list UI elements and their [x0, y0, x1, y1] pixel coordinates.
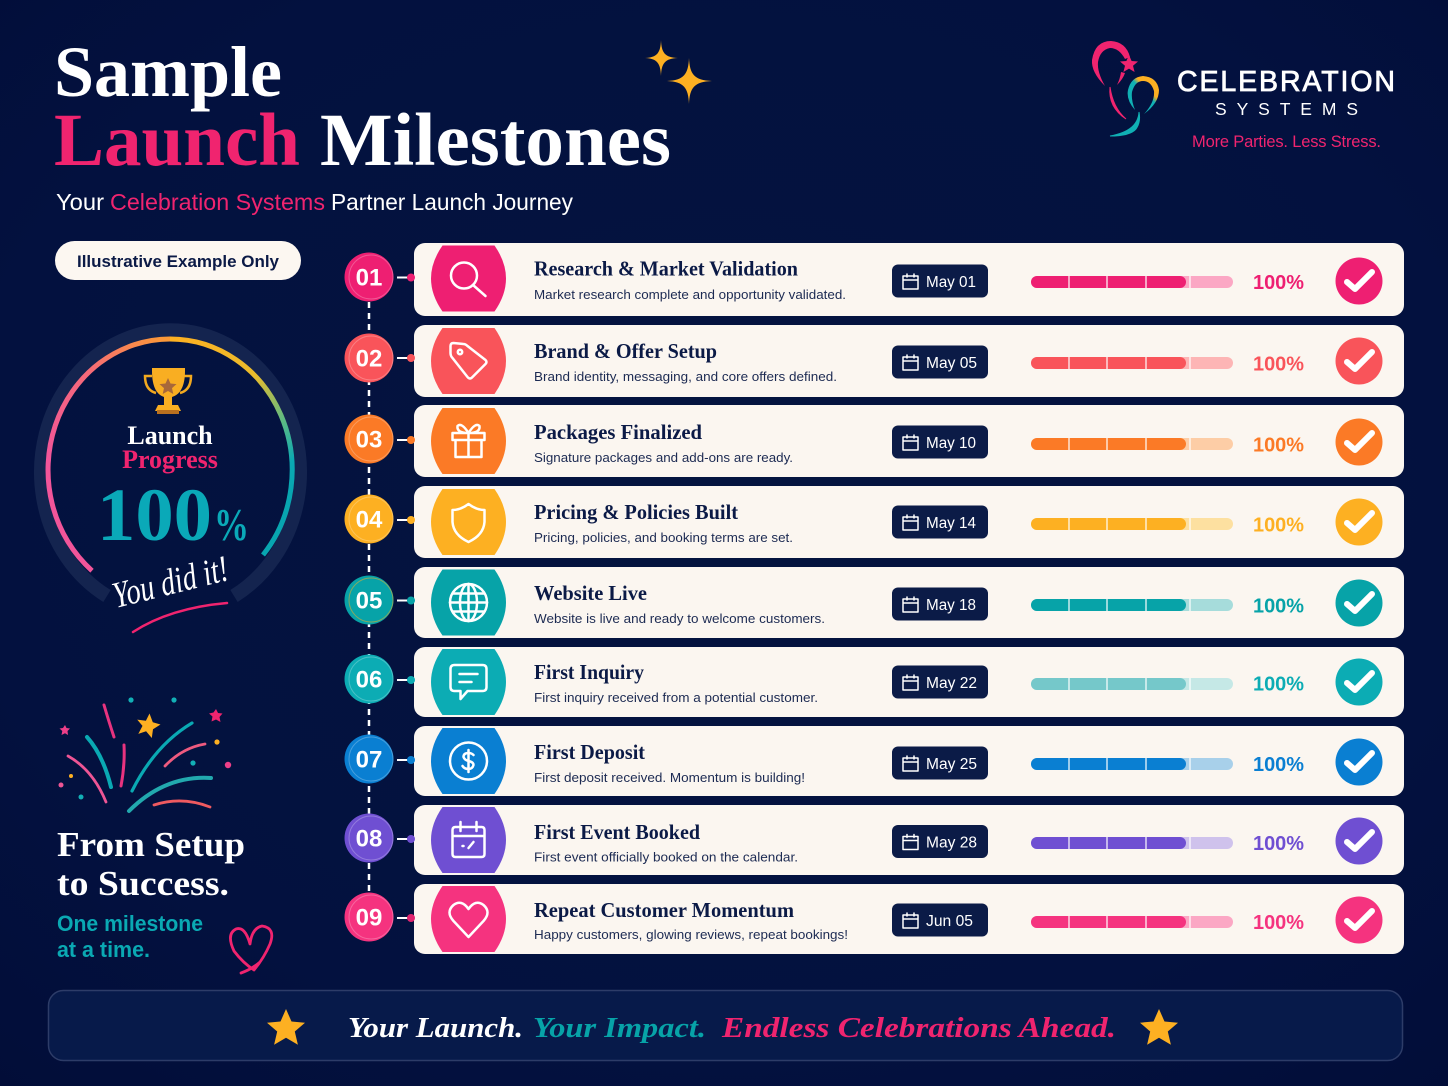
timeline dashed line [368, 280, 370, 917]
step number: 04 [356, 506, 383, 534]
date pill [892, 666, 988, 698]
footer message [348, 1012, 1116, 1044]
icon: check [1336, 658, 1382, 706]
date pill [892, 346, 988, 378]
milestone description: First deposit received. Momentum is building! [534, 770, 805, 785]
icon: check [1336, 580, 1382, 626]
milestone 03 [344, 405, 1404, 477]
footer message: Your Impact. [533, 1012, 706, 1044]
date pill [892, 825, 988, 858]
step number: 02 [356, 346, 382, 372]
icon: price tag [431, 328, 506, 394]
handwritten note: You did it! [108, 548, 233, 617]
step number: 05 [356, 588, 382, 614]
milestone description: Website is live and ready to welcome customers. [534, 611, 825, 626]
icon: check [1336, 818, 1382, 864]
heading: from setup to success [57, 825, 245, 903]
icon: hand-drawn heart [230, 926, 272, 973]
milestone 08 [344, 805, 1404, 875]
logo: Celebration Systems [1092, 41, 1395, 151]
date pill [892, 426, 988, 458]
footer message: Your Launch. [348, 1012, 523, 1044]
icon: sparkles [645, 40, 712, 104]
milestone description: Market research complete and opportunity validated. [534, 287, 846, 302]
subtitle [56, 189, 573, 215]
logo wordmark: CELEBRATION [1177, 66, 1395, 98]
step number [344, 892, 415, 942]
date pill: May 25 [926, 756, 977, 773]
gauge label [122, 421, 218, 474]
icon: heart [431, 886, 506, 952]
icon: check [1336, 738, 1382, 786]
icon: magnifier [431, 246, 506, 312]
card [414, 486, 1404, 558]
milestone description: First event officially booked on the calendar. [534, 850, 798, 864]
card [414, 405, 1404, 477]
title [54, 32, 671, 182]
milestone title: Research & Market Validation [534, 256, 798, 280]
gauge: launch progress [41, 330, 300, 632]
heading: from setup to success: From Setup [57, 825, 245, 864]
progress bar [1031, 276, 1233, 288]
tagline: one milestone at a time: at a time. [57, 937, 150, 962]
milestone description: First inquiry received from a potential customer. [534, 690, 818, 705]
date pill: May 10 [926, 435, 976, 452]
card [414, 243, 1404, 316]
badge: illustrative example: Illustrative Example Only [77, 252, 280, 271]
date pill [892, 746, 988, 780]
icon: check [1336, 498, 1382, 546]
milestone description: Happy customers, glowing reviews, repeat bookings! [534, 927, 848, 942]
progress bar [1031, 678, 1233, 690]
card [414, 726, 1404, 796]
percent: 100% [1253, 754, 1304, 776]
icon: balloons [1092, 41, 1159, 136]
milestone title: First Event Booked [534, 820, 700, 844]
icon: trophy [145, 368, 191, 414]
icon: right star [1140, 1009, 1178, 1045]
underline swoosh [133, 603, 227, 632]
icon: check [1336, 258, 1382, 304]
milestone 04 [344, 486, 1404, 558]
card [414, 567, 1404, 638]
icon: shield [431, 489, 506, 555]
title: Milestones [320, 99, 671, 182]
step number [344, 734, 415, 784]
step number [344, 414, 415, 464]
percent: 100% [1253, 674, 1304, 696]
subtitle: Your [56, 189, 104, 215]
progress bar [1031, 438, 1233, 450]
date pill [892, 588, 988, 620]
step number: 08 [356, 826, 382, 852]
icon: chat bubble [431, 649, 506, 715]
footer banner [48, 990, 1402, 1060]
title: Launch [54, 99, 300, 182]
date pill: May 14 [926, 515, 976, 532]
badge: illustrative example [55, 241, 301, 280]
milestone 07 [344, 726, 1404, 796]
title: Sample [54, 32, 282, 112]
date pill [892, 904, 988, 936]
milestone description: Brand identity, messaging, and core offers defined. [534, 369, 837, 384]
gauge label: Progress [122, 445, 218, 474]
icon: check [1336, 338, 1382, 384]
progress bar [1031, 916, 1233, 928]
icon: globe [431, 570, 506, 636]
subtitle: Partner Launch Journey [331, 189, 573, 215]
illustration: fireworks [58, 697, 231, 811]
step number [344, 814, 415, 862]
step number [344, 654, 415, 704]
date pill [892, 506, 988, 538]
icon: gift [431, 408, 506, 474]
step number: 01 [356, 264, 382, 292]
step number: 07 [356, 746, 382, 774]
date pill: May 22 [926, 675, 977, 692]
icon: check [1336, 896, 1382, 944]
step number: 03 [356, 426, 382, 454]
card [414, 805, 1404, 875]
milestone title: Repeat Customer Momentum [534, 898, 794, 922]
date pill: May 05 [926, 355, 977, 372]
milestone title: Packages Finalized [534, 420, 702, 444]
progress bar [1031, 758, 1233, 770]
icon: check [1336, 418, 1382, 466]
gauge value 100%: 100 [97, 474, 212, 557]
step number: 09 [356, 904, 382, 932]
date pill: May 18 [926, 597, 976, 614]
percent: 100% [1253, 354, 1304, 376]
date pill: Jun 05 [926, 913, 973, 930]
milestone description: Pricing, policies, and booking terms are set. [534, 530, 793, 545]
milestone 05 [344, 567, 1404, 638]
percent: 100% [1253, 434, 1304, 456]
percent: 100% [1253, 514, 1304, 536]
milestone description: Signature packages and add-ons are ready. [534, 450, 793, 465]
tagline: one milestone at a time [57, 911, 203, 962]
date pill: May 01 [926, 274, 976, 291]
step number [344, 494, 415, 544]
percent: 100% [1253, 272, 1304, 294]
date pill: May 28 [926, 834, 977, 852]
progress bar [1031, 599, 1233, 611]
tagline: one milestone at a time: One milestone [57, 911, 203, 936]
icon: dollar coin [431, 728, 506, 794]
milestone title: First Deposit [534, 740, 645, 764]
step number [344, 252, 415, 302]
progress bar [1031, 357, 1233, 369]
icon: left star [267, 1009, 305, 1045]
milestone title: Website Live [534, 581, 647, 605]
progress bar [1031, 518, 1233, 530]
step number [344, 334, 415, 382]
card [414, 647, 1404, 717]
logo tagline: More Parties. Less Stress. [1192, 133, 1381, 151]
milestone 02 [344, 325, 1404, 397]
step number [344, 576, 415, 624]
milestone 06 [344, 647, 1404, 717]
milestone title: Brand & Offer Setup [534, 339, 717, 363]
heading: from setup to success: to Success. [57, 864, 229, 903]
percent: 100% [1253, 596, 1304, 618]
footer message: Endless Celebrations Ahead. [721, 1012, 1116, 1044]
gauge progress arc [48, 339, 292, 571]
milestone 09 [344, 884, 1404, 954]
percent: 100% [1253, 912, 1304, 934]
percent: 100% [1253, 833, 1304, 855]
date pill [892, 264, 988, 298]
gauge track [41, 330, 300, 596]
logo sub-wordmark: SYSTEMS [1215, 99, 1358, 119]
card [414, 325, 1404, 397]
icon: calendar [431, 807, 506, 873]
gauge value 100%: % [214, 499, 249, 550]
progress bar [1031, 837, 1233, 849]
step number: 06 [356, 666, 382, 694]
gauge label: Launch [127, 421, 213, 450]
milestone 01 [344, 243, 1404, 316]
milestone title: Pricing & Policies Built [534, 500, 738, 524]
subtitle: Celebration Systems [110, 189, 325, 215]
milestone title: First Inquiry [534, 660, 644, 684]
card [414, 884, 1404, 954]
